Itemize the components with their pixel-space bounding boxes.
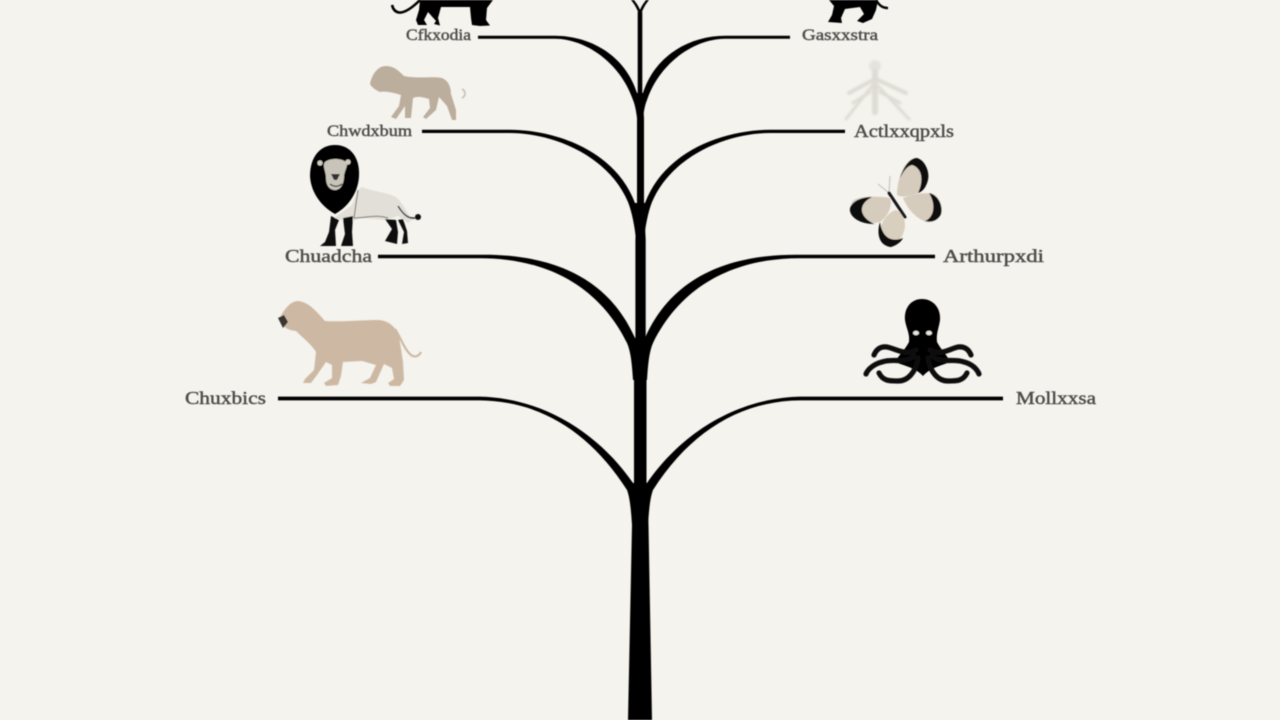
lion body <box>334 187 413 223</box>
icon: butterfly <box>850 158 942 247</box>
icon: tan lion, row four left <box>278 301 421 386</box>
butterfly antennae <box>878 176 890 193</box>
butterfly lower left wing <box>879 210 905 246</box>
branch: Chwdxbum <box>422 130 641 240</box>
branch: Mollxxsa <box>639 397 1003 525</box>
branch: Gasxxstra <box>639 36 790 118</box>
label: Chuadcha: Chuadcha <box>285 246 372 266</box>
butterfly lower right wing <box>903 193 942 222</box>
icon: faded arthropod <box>846 60 909 119</box>
branch: Chuadcha <box>378 255 641 380</box>
lion tail <box>398 206 415 218</box>
butterfly body <box>889 193 905 217</box>
label: Arthurpxdi: Arthurpxdi <box>943 246 1044 266</box>
icon: black feline, top right <box>828 0 888 23</box>
label: Cfkxodia: Cfkxodia <box>406 27 471 44</box>
octopus tentacles <box>866 347 979 381</box>
branch: Actlxxqpxls <box>639 130 845 240</box>
icon: black-maned lion <box>310 145 421 246</box>
top fork <box>631 0 649 18</box>
tree trunk <box>628 12 652 720</box>
branch: Arthurpxdi <box>639 255 935 380</box>
lion face <box>324 159 347 190</box>
label: Chuxbics: Chuxbics <box>185 388 266 408</box>
lion legs <box>320 216 408 246</box>
label: Gasxxstra: Gasxxstra <box>802 27 878 44</box>
octopus head <box>895 299 950 376</box>
butterfly upper right wing <box>897 158 928 197</box>
octopus eyes <box>913 331 919 335</box>
label: Mollxxsa: Mollxxsa <box>1016 388 1096 408</box>
label: Chwdxbum: Chwdxbum <box>327 123 413 140</box>
branch: Cfkxodia <box>478 36 641 118</box>
lion belly line <box>354 190 388 218</box>
label: Actlxxqpxls: Actlxxqpxls <box>854 121 954 141</box>
branch: Chuxbics <box>278 397 641 525</box>
butterfly upper left wing <box>851 197 891 223</box>
phylogenetic tree <box>278 0 1003 720</box>
lion ears <box>317 160 323 166</box>
lion mane <box>310 145 359 214</box>
icon: tan lion, row two left <box>370 66 465 120</box>
icon: octopus <box>866 299 979 381</box>
icon: black lion, top left <box>392 0 493 26</box>
